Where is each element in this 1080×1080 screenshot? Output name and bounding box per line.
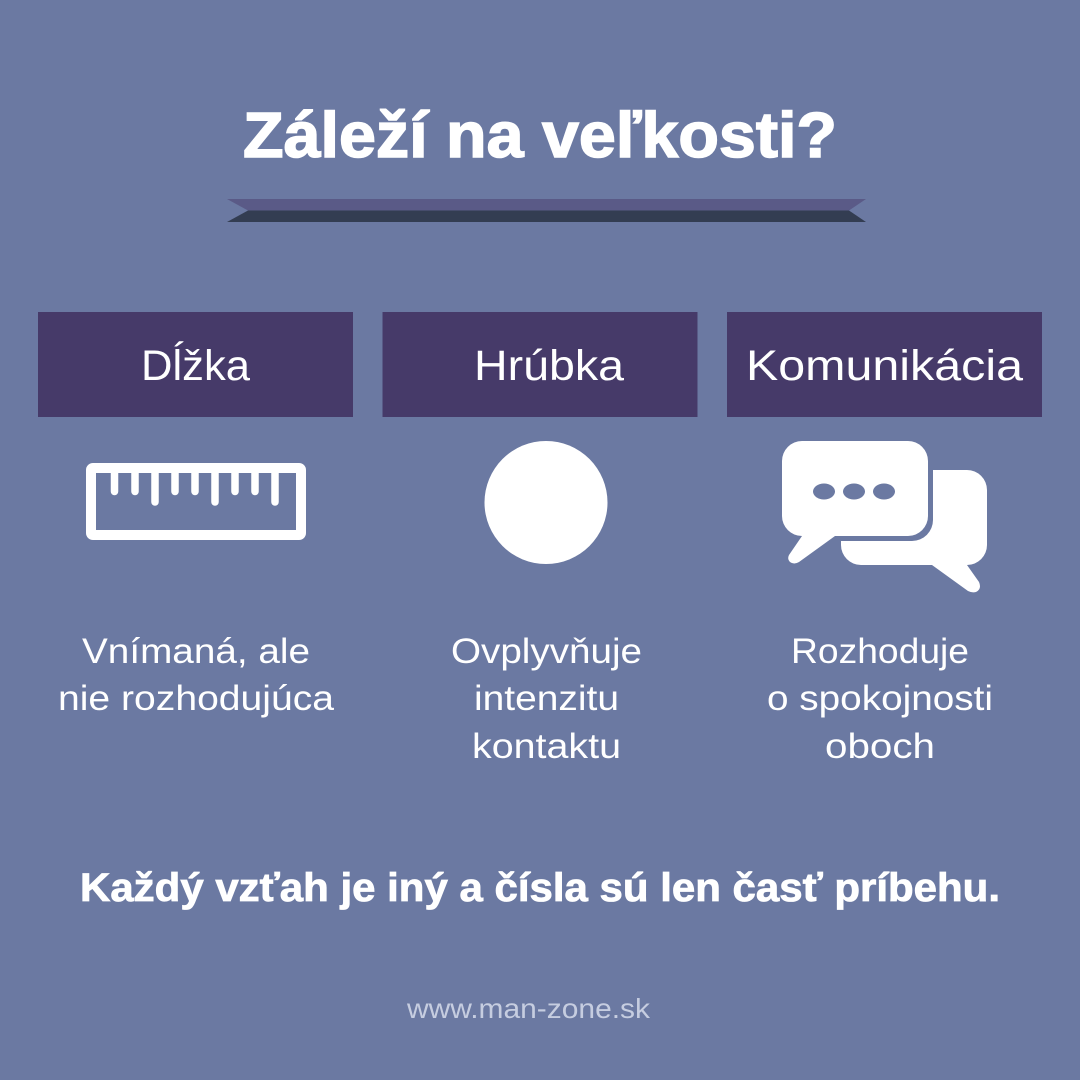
description: Komunikácia: oboch: [825, 727, 935, 766]
description: Dĺžka: [58, 632, 335, 718]
description: Hrúbka: intenzitu: [474, 679, 619, 718]
title ribbon divider: [227, 199, 866, 222]
header box: Dĺžka: [38, 312, 353, 417]
description: Dĺžka: nie rozhodujúca: [58, 679, 335, 718]
website footer: www.man-zone.sk: [406, 993, 651, 1024]
icon: circle: [484, 441, 608, 564]
description: Komunikácia: o spokojnosti: [767, 679, 993, 718]
panel: Hrúbka: [382, 312, 698, 766]
icon: ruler: [91, 468, 301, 535]
description: Komunikácia: Rozhoduje: [791, 632, 969, 671]
heading: Hrúbka: Hrúbka: [474, 342, 624, 390]
header box: Komunikácia: [727, 312, 1042, 417]
description: Hrúbka: kontaktu: [472, 727, 621, 766]
heading: Komunikácia: Komunikácia: [746, 342, 1023, 390]
closing statement: Každý vzťah je iný a čísla sú len časť príbehu.: [80, 866, 1000, 910]
description: Komunikácia: [767, 632, 993, 766]
title: Záleží na veľkosti?: [243, 99, 837, 171]
header box: Hrúbka: [382, 312, 698, 417]
description: Hrúbka: [451, 632, 642, 766]
panel: Dĺžka: [38, 312, 353, 718]
description: Hrúbka: Ovplyvňuje: [451, 632, 642, 671]
icon: speech bubbles: [782, 441, 987, 592]
panel: Komunikácia: [727, 312, 1042, 766]
description: Dĺžka: Vnímaná, ale: [82, 632, 310, 671]
heading: Dĺžka: Dĺžka: [141, 341, 250, 390]
